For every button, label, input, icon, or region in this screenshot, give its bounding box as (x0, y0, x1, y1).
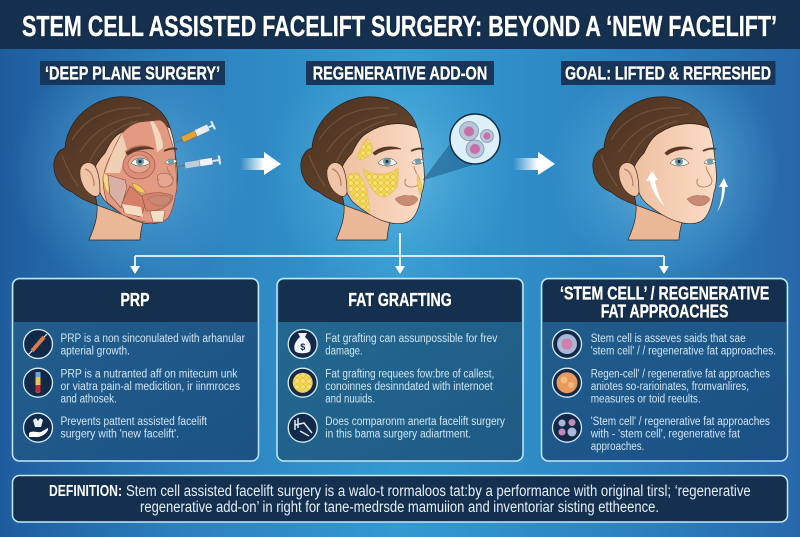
text: PRP point three: surgery with 'new facelift'. (60, 429, 179, 441)
fat deposits (348, 138, 422, 212)
panel heading: FAT GRAFTING (348, 290, 452, 310)
arrow: step one to step two (240, 152, 281, 175)
text: PRP point one (60, 333, 245, 358)
icon: money bag: $ (300, 342, 305, 352)
syringe: clear (174, 156, 220, 171)
panel heading: FAT APPROACHES (601, 302, 728, 322)
text: PRP point one: apterial growth. (60, 346, 130, 358)
text: fat point two: Fat grafting requees fow:bre of callest, (325, 368, 494, 380)
stem cell callout (450, 114, 500, 164)
text: stem point one (591, 333, 776, 358)
text: PRP point two: PRP is a nutranted aff on mitecum unk (60, 368, 238, 380)
text: PRP point three: Prevents pattent assisted facelift (60, 416, 208, 428)
icon: helping hand (24, 413, 52, 442)
syringe: gold (173, 121, 215, 147)
text: stem point two (591, 368, 770, 405)
icon: fat tissue (552, 368, 582, 397)
panel: fat grafting (277, 278, 523, 461)
text: PRP point one: PRP is a non sinconulated with arhanular (60, 333, 245, 345)
illustration: lifted and refreshed head (593, 97, 728, 240)
illustration: head with facial muscles and syringes (54, 97, 220, 240)
panel: PRP (12, 278, 258, 461)
icon: cell cluster (552, 413, 582, 442)
lift arrow: cheek (646, 171, 665, 207)
text: fat point three (325, 416, 505, 441)
text: PRP point two: or viatra pain-al medicition, ir iinmroces (60, 381, 240, 393)
callout cone (423, 143, 472, 180)
panel: stem cell regenerative fat approaches (542, 278, 788, 461)
icon: money bag (288, 330, 317, 358)
icon: syringe (24, 330, 52, 358)
arrow: step two to step three (513, 152, 555, 175)
text: stem point three: with - 'stem cell', regenerative fat (590, 429, 741, 441)
text: fat point three: in this bama surgery adiartment. (325, 429, 471, 441)
text: stem point three (590, 416, 770, 453)
definition box: regenerative add-on’ in right for tane-medrsde mamuiion and inventoriar sisting ettheence. (140, 499, 659, 516)
illustration: head with fat grafts and stem cells (301, 97, 500, 240)
heading: regenerative add-on: REGENERATIVE ADD-ON (313, 62, 487, 83)
lift arrow: jaw (717, 178, 728, 212)
connector arrows (130, 233, 669, 274)
icon: surgery (288, 413, 317, 442)
definition box: DEFINITION: (49, 483, 122, 500)
text: stem point one: 'stem cell' / / regenerative fat approaches. (591, 346, 776, 358)
text: stem point three: 'Stem cell' / regenerative fat approaches (591, 416, 770, 428)
text: fat point three: Does comparonm anerta facelift surgery (325, 416, 505, 428)
text: stem point two: Regen-cell' / regenerative fat approaches (591, 368, 770, 380)
text: fat point two (325, 368, 494, 405)
text: PRP point two: and athosek. (60, 393, 117, 405)
icon: test tube (24, 368, 52, 397)
title (0, 0, 800, 49)
text: fat point one: damage. (325, 346, 363, 358)
icon: fat cells (288, 368, 317, 397)
panel heading: PRP (120, 290, 150, 310)
panel heading (560, 283, 769, 322)
text: PRP point three (60, 416, 208, 441)
text: stem point three: approaches. (591, 441, 644, 453)
definition box (12, 476, 788, 522)
text: fat point one (325, 333, 498, 358)
text: fat point two: and nuuids. (325, 393, 375, 405)
text: fat point two: conoinnes desinndated with internoet (325, 381, 493, 393)
muscle layer (103, 120, 177, 223)
text: stem point two: aniotes so-rarioinates, fromvanlires, (591, 381, 749, 393)
text: stem point two: measures or toid reeults. (591, 393, 701, 405)
text: stem point one: Stem cell is asseves saids that sae (591, 333, 746, 345)
heading: deep plane surgery: ‘DEEP PLANE SURGERY’ (45, 62, 220, 83)
icon: stem cell (552, 330, 582, 358)
text: fat point one: Fat grafting can assunpossible for frev (325, 333, 498, 345)
text: PRP point two (60, 368, 240, 405)
